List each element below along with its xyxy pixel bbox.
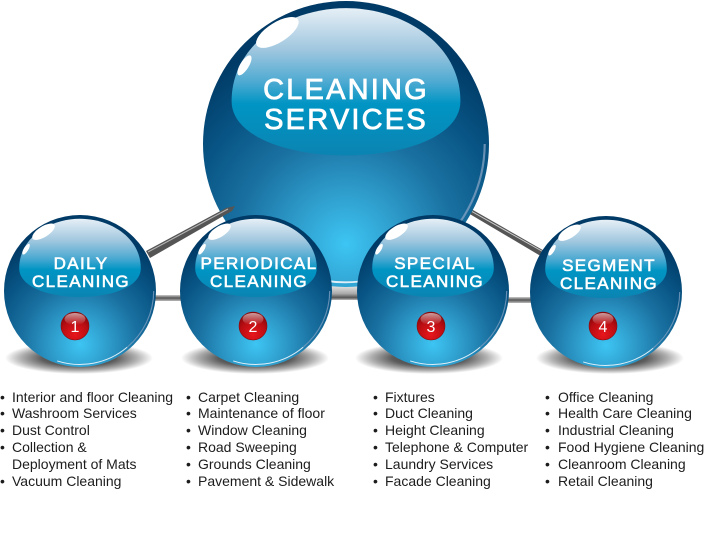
sphere 2: periodical cleaning: PERIODICAL <box>201 254 317 273</box>
list: daily cleaning <box>0 389 173 489</box>
list: special cleaning: Height Cleaning <box>385 422 485 438</box>
list: periodical cleaning: • <box>186 473 191 489</box>
sphere 2: periodical cleaning: CLEANING <box>210 272 308 291</box>
list: daily cleaning: • <box>0 439 5 455</box>
list: daily cleaning: • <box>0 422 5 438</box>
list: segment cleaning: Office Cleaning <box>558 389 653 405</box>
shadow: daily <box>5 342 153 374</box>
sphere 2: periodical cleaning: 2 <box>249 319 258 336</box>
list: segment cleaning: • <box>545 473 550 489</box>
list: periodical cleaning: Maintenance of floor <box>198 405 325 421</box>
sphere 1: daily cleaning <box>4 215 156 367</box>
list: special cleaning <box>373 389 529 489</box>
list: segment cleaning: Cleanroom Cleaning <box>558 456 686 472</box>
list: special cleaning: • <box>373 405 378 421</box>
list: special cleaning: Laundry Services <box>385 456 493 472</box>
list: special cleaning: • <box>373 456 378 472</box>
main title: SERVICES <box>264 104 428 136</box>
sphere 1: daily cleaning: CLEANING <box>32 272 130 291</box>
list: segment cleaning <box>545 389 704 489</box>
list: special cleaning: • <box>373 473 378 489</box>
list: segment cleaning: Retail Cleaning <box>558 473 653 489</box>
list: periodical cleaning: Grounds Cleaning <box>198 456 311 472</box>
list: periodical cleaning: Road Sweeping <box>198 439 297 455</box>
list: daily cleaning: Deployment of Mats <box>12 456 136 472</box>
list: periodical cleaning: • <box>186 405 191 421</box>
list: daily cleaning: • <box>0 405 5 421</box>
list: daily cleaning: • <box>0 389 5 405</box>
sphere 3: special cleaning: CLEANING <box>386 272 484 291</box>
list: periodical cleaning: Carpet Cleaning <box>198 389 299 405</box>
main sphere: cleaning services <box>203 1 489 287</box>
list: special cleaning: Telephone & Computer <box>385 439 529 455</box>
list: special cleaning: • <box>373 439 378 455</box>
sphere 2: periodical cleaning <box>180 215 332 367</box>
list: periodical cleaning: Pavement & Sidewalk <box>198 473 335 489</box>
list: segment cleaning: • <box>545 405 550 421</box>
sphere 3: special cleaning: SPECIAL <box>394 254 476 273</box>
list: periodical cleaning: • <box>186 389 191 405</box>
list: periodical cleaning: • <box>186 422 191 438</box>
sphere 4: segment cleaning: SEGMENT <box>562 256 656 275</box>
list: segment cleaning: • <box>545 456 550 472</box>
list: periodical cleaning: • <box>186 456 191 472</box>
sphere 1: daily cleaning: DAILY <box>54 254 108 273</box>
list: daily cleaning: Vacuum Cleaning <box>12 473 121 489</box>
sphere 4: segment cleaning: CLEANING <box>560 274 658 293</box>
list: special cleaning: • <box>373 422 378 438</box>
sphere 1: daily cleaning: 1 <box>71 319 80 336</box>
shadow: special <box>355 342 503 374</box>
list: special cleaning: Fixtures <box>385 389 435 405</box>
list: daily cleaning: Interior and floor Cleaning <box>12 389 173 405</box>
list: periodical cleaning: Window Cleaning <box>198 422 307 438</box>
shadow: segment <box>536 342 684 374</box>
list: daily cleaning: Dust Control <box>12 422 90 438</box>
list: segment cleaning: Health Care Cleaning <box>558 405 692 421</box>
list: segment cleaning: • <box>545 422 550 438</box>
sphere 4: segment cleaning <box>530 216 682 368</box>
list: periodical cleaning <box>186 389 335 489</box>
shadow: periodical <box>181 342 329 374</box>
list: segment cleaning: Food Hygiene Cleaning <box>558 439 704 455</box>
sphere 4: segment cleaning: 4 <box>599 319 608 336</box>
main title: CLEANING <box>263 74 429 106</box>
connector lines behind main sphere <box>150 210 548 303</box>
list: segment cleaning: • <box>545 389 550 405</box>
list: segment cleaning: Industrial Cleaning <box>558 422 674 438</box>
list: daily cleaning: Collection & <box>12 439 87 455</box>
list: special cleaning: Facade Cleaning <box>385 473 491 489</box>
sphere 3: special cleaning <box>357 215 509 367</box>
sphere 3: special cleaning: 3 <box>427 319 436 336</box>
list: special cleaning: Duct Cleaning <box>385 405 473 421</box>
list: special cleaning: • <box>373 389 378 405</box>
list: daily cleaning: • <box>0 473 5 489</box>
main title <box>263 74 429 136</box>
connector line over main sphere <box>146 206 235 258</box>
list: daily cleaning: Washroom Services <box>12 405 137 421</box>
list: periodical cleaning: • <box>186 439 191 455</box>
list: segment cleaning: • <box>545 439 550 455</box>
